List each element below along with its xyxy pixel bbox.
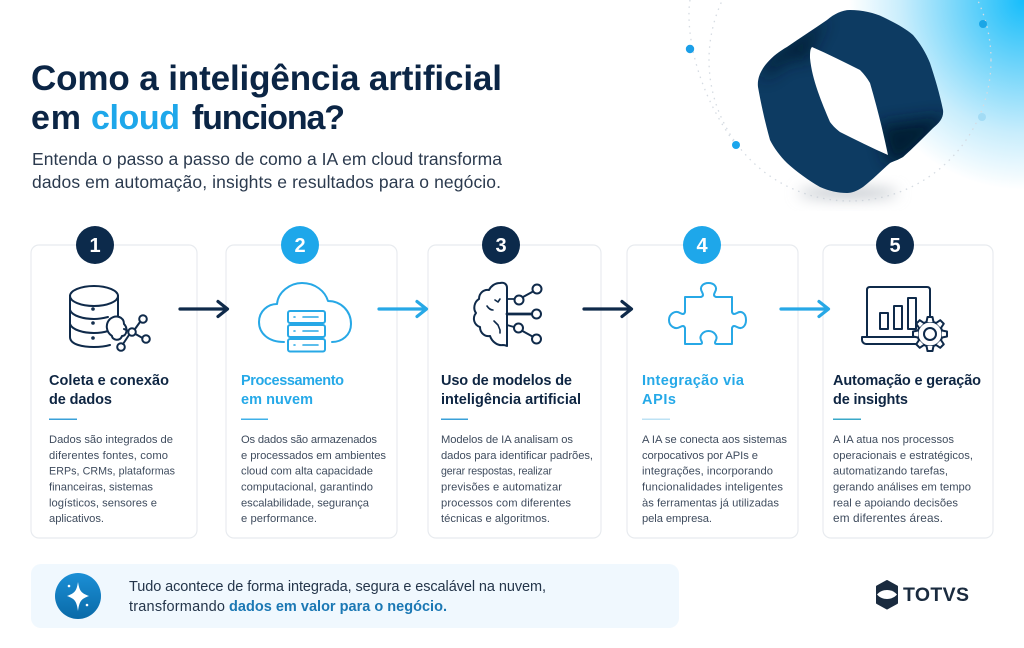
step description: Os dados são armazenados bbox=[241, 434, 377, 446]
step description: automatizando tarefas, bbox=[833, 466, 948, 478]
step description: computacional, garantindo bbox=[241, 482, 373, 494]
step title bbox=[441, 373, 581, 408]
step title bbox=[833, 373, 981, 408]
background gradient corner bbox=[820, 0, 1024, 210]
step number 4: 4 bbox=[696, 235, 708, 257]
step title: de insights bbox=[833, 392, 908, 408]
icon: puzzle piece bbox=[669, 283, 746, 344]
logo: TOTVS bbox=[877, 581, 969, 608]
panel: step 5 bbox=[823, 226, 993, 538]
step description: pela empresa. bbox=[642, 513, 712, 525]
step title: APIs bbox=[642, 392, 676, 408]
step number 1 bbox=[76, 226, 114, 264]
step description bbox=[833, 434, 973, 525]
step title: de dados bbox=[49, 392, 112, 408]
decorative ring illustration bbox=[686, 0, 991, 201]
callout banner bbox=[31, 564, 679, 628]
subtitle bbox=[32, 149, 502, 192]
step title: Coleta e conexão bbox=[49, 373, 169, 389]
title: funciona? bbox=[192, 99, 345, 137]
step title bbox=[642, 373, 745, 408]
logo: TOTVS: TOTVS bbox=[903, 584, 969, 606]
step number 3: 3 bbox=[495, 235, 507, 257]
step number 5 bbox=[876, 226, 914, 264]
title: Como a inteligência artificial bbox=[31, 59, 502, 98]
icon: database network bbox=[70, 286, 150, 351]
icon: AI brain bbox=[474, 283, 542, 346]
arrow 2 bbox=[379, 302, 426, 316]
title bbox=[31, 59, 502, 137]
arrow 3 bbox=[584, 302, 632, 316]
step description: Dados são integrados de bbox=[49, 434, 173, 446]
callout text bbox=[129, 579, 546, 615]
step description: corpocativos por APIs e bbox=[642, 450, 758, 462]
step description: logísticos, sensores e bbox=[49, 498, 157, 510]
step title bbox=[241, 373, 344, 408]
step description: ERPs, CRMs, plataformas bbox=[49, 466, 175, 478]
step description: A IA atua nos processos bbox=[833, 434, 954, 446]
step description: dados para identificar padrões, bbox=[441, 450, 593, 462]
step description: escalabilidade, segurança bbox=[241, 498, 370, 510]
step description: às ferramentas já utilizadas bbox=[642, 498, 779, 510]
step title: Automação e geração bbox=[833, 373, 981, 389]
step title: Uso de modelos de bbox=[441, 373, 572, 389]
panel: step 1 bbox=[31, 226, 197, 538]
step description bbox=[642, 434, 787, 525]
step description bbox=[441, 434, 593, 525]
step title: inteligência artificial bbox=[441, 392, 581, 408]
step description: integrações, incorporando bbox=[642, 466, 773, 478]
callout text: Tudo acontece de forma integrada, segura e escalável na nuvem, bbox=[129, 579, 546, 595]
subtitle: dados em automação, insights e resultados para o negócio. bbox=[32, 172, 501, 192]
step number 3 bbox=[482, 226, 520, 264]
step description: e processados em ambientes bbox=[241, 450, 386, 462]
step title: Processamento bbox=[241, 373, 344, 389]
step description: Modelos de IA analisam os bbox=[441, 434, 573, 446]
step number 2: 2 bbox=[294, 235, 306, 257]
step title: em nuvem bbox=[241, 392, 313, 408]
icon: cloud server bbox=[259, 283, 351, 352]
arrow 1 bbox=[180, 302, 228, 316]
step description: aplicativos. bbox=[49, 513, 104, 525]
panel: step 3 bbox=[428, 226, 601, 538]
step description: cloud com alta capacidade bbox=[241, 466, 373, 478]
step description: A IA se conecta aos sistemas bbox=[642, 434, 787, 446]
callout text: transformando bbox=[129, 599, 225, 615]
subtitle: Entenda o passo a passo de como a IA em cloud transforma bbox=[32, 149, 502, 169]
step description: diferentes fontes, como bbox=[49, 450, 168, 462]
title: em bbox=[31, 99, 81, 137]
step description bbox=[49, 434, 175, 525]
arrow 4 bbox=[781, 302, 828, 316]
panel: step 2 bbox=[226, 226, 397, 538]
step title: Integração via bbox=[642, 373, 745, 389]
step description: real e apoiando decisões bbox=[833, 498, 958, 510]
step description: funcionalidades inteligentes bbox=[642, 482, 783, 494]
step title bbox=[49, 373, 169, 408]
step number 5: 5 bbox=[889, 235, 901, 257]
step description: gerar respostas, realizar bbox=[441, 466, 552, 478]
step description: processos com diferentes bbox=[441, 498, 571, 510]
callout text: dados em valor para o negócio. bbox=[229, 599, 447, 615]
step description: em diferentes áreas. bbox=[833, 511, 943, 525]
step number 4 bbox=[683, 226, 721, 264]
step description: gerando análises em tempo bbox=[833, 482, 971, 494]
step description: operacionais e estratégicos, bbox=[833, 450, 973, 462]
step description: previsões e automatizar bbox=[441, 482, 562, 494]
step description: e performance. bbox=[241, 513, 317, 525]
icon: sparkle bbox=[55, 573, 101, 619]
step description: técnicas e algoritmos. bbox=[441, 513, 550, 525]
step description bbox=[241, 434, 386, 525]
step number 2 bbox=[281, 226, 319, 264]
icon: laptop chart and gear bbox=[862, 287, 947, 351]
step description: financeiras, sistemas bbox=[49, 482, 153, 494]
title: cloud bbox=[91, 99, 180, 137]
panel: step 4 bbox=[627, 226, 798, 538]
step number 1: 1 bbox=[89, 235, 101, 257]
